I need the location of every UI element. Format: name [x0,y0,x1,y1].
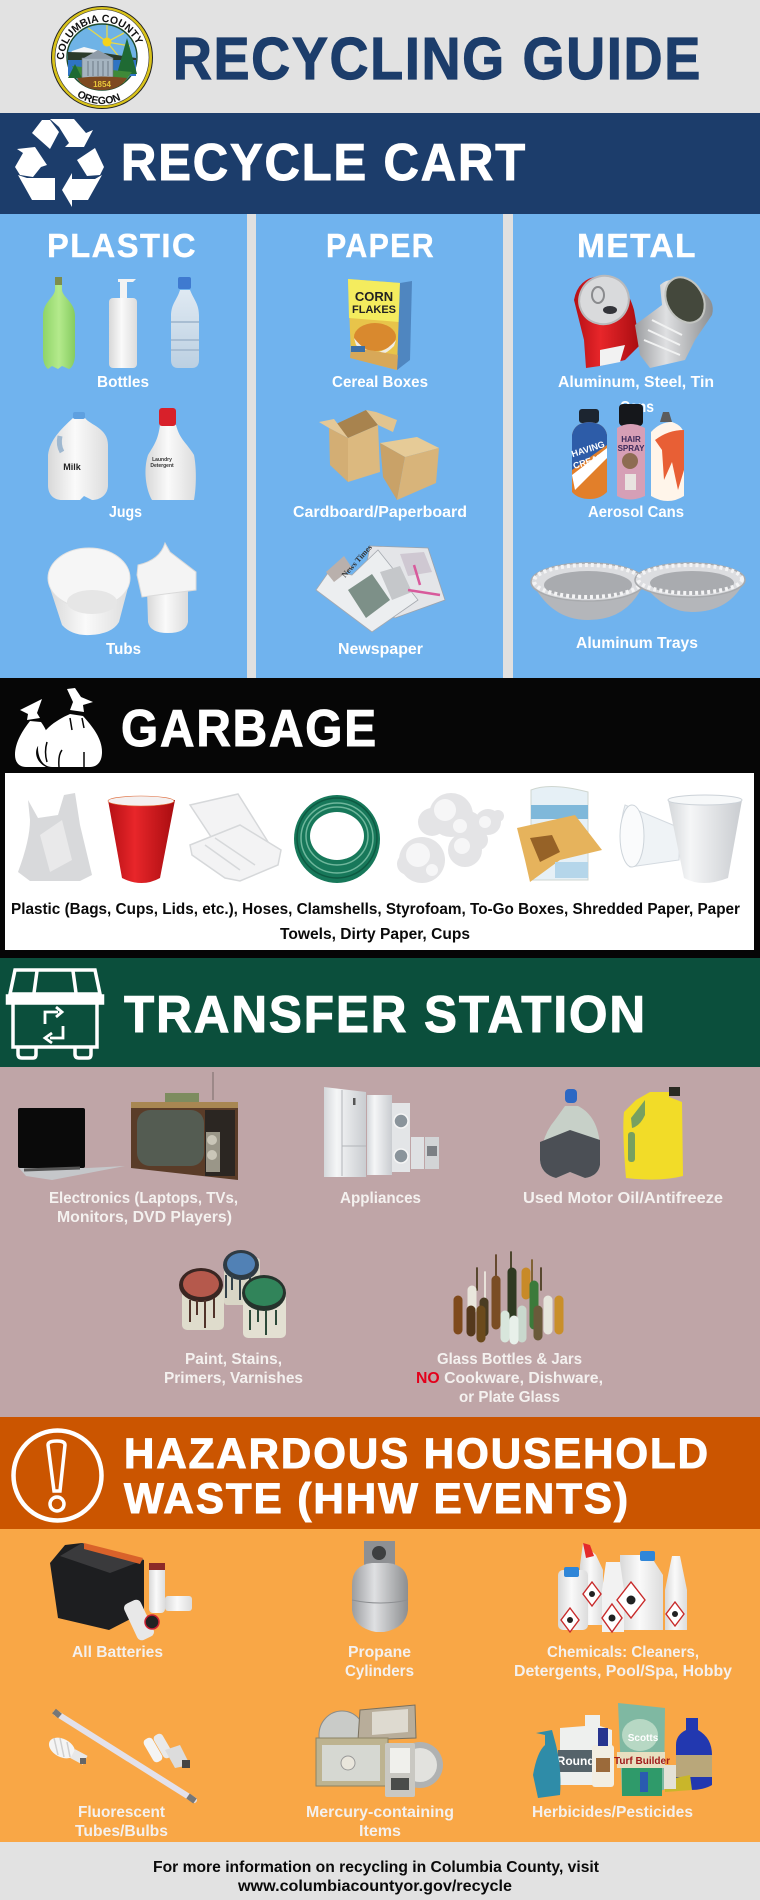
heading: paper: PAPER [326,227,435,264]
heading: hazardous household waste [124,1430,710,1523]
icon: jugs [48,408,196,500]
icon: aerosol cans: HAVING [570,439,606,459]
icon: hose [294,795,380,883]
label: mercury: Mercury-containing [306,1804,454,1821]
icon: garbage bags [15,688,102,767]
icon: jugs: Laundry [152,457,172,463]
heading: hazardous household waste: WASTE (HHW EVENTS) [124,1475,630,1523]
icon: aerosol cans [570,404,684,501]
icon: herbicides and pesticides: Turf Builder [614,1756,670,1767]
text: garbage items: Towels, Dirty Paper, Cups [280,926,470,943]
label: cans overflow line: Cans [620,399,654,416]
icon: clamshell [190,794,281,881]
icon: dumpster [8,970,102,1058]
icon: bottles [43,277,199,369]
title: RECYCLING GUIDE [173,26,702,92]
label: electronics [49,1190,238,1226]
icon: aluminum trays [531,563,745,620]
icon: herbicides and pesticides [533,1703,712,1798]
icon: herbicides and pesticides: Roundup [557,1754,609,1768]
icon: glass bottles [458,1252,559,1340]
county seal logo: COLUMBIA COUNTY [56,14,144,60]
label: motor oil: Used Motor Oil/Antifreeze [523,1190,723,1207]
label: chemicals: Chemicals: Cleaners, [547,1644,699,1661]
icon: laptop and tv [18,1072,238,1180]
icon: cereal box [348,279,412,370]
icon: tubs [48,543,196,635]
icon: paint cans [179,1250,286,1338]
icon: chemical bottles [558,1543,687,1632]
county seal logo: OREGON [78,91,120,104]
heading: plastic: PLASTIC [47,227,197,264]
icon: cereal box: FLAKES [352,304,396,316]
label: cardboard/paperboard: Cardboard/Paperboard [293,504,467,521]
heading: garbage: GARBAGE [121,700,378,758]
icon: newspapers [316,543,445,632]
label: aluminum, steel, tin cans: Aluminum, Steel, Tin [558,374,714,391]
county seal logo: 1854 [93,80,111,89]
icon: recycle symbol [15,119,104,207]
label: jugs: Jugs [109,504,142,521]
icon: crushed cans [571,268,713,368]
icon: dirty paper [517,786,602,882]
panel: paper [256,214,503,678]
icon: newspapers: News Times [340,543,374,579]
icon: cereal box: CORN [355,289,393,304]
label: cereal boxes: Cereal Boxes [332,374,428,391]
footer text: www.columbiacountyor.gov/recycle [237,1878,512,1895]
icon: aerosol cans: SPRAY [618,444,645,453]
label: paint [164,1351,303,1387]
label: electronics: Electronics (Laptops, TVs, [49,1190,238,1207]
panel: plastic [0,214,247,678]
panel: hazardous items [45,1541,732,1840]
label: mercury: Items [359,1823,401,1840]
footer text: For more information on recycling in Columbia County, visit [153,1859,599,1876]
icon: jugs: Milk [63,462,82,472]
label: newspaper: Newspaper [338,641,423,658]
label: paint: Primers, Varnishes [164,1370,303,1387]
label: fluorescent: Fluorescent [78,1804,165,1821]
icon: jugs: Detergent [150,463,174,469]
label: bottles: Bottles [97,374,149,391]
heading: metal: METAL [577,227,697,264]
label: chemicals [514,1644,732,1680]
icon: warning exclamation [14,1430,102,1520]
icon: fluorescent tube and bulbs [45,1711,195,1801]
label: propane: Cylinders [345,1663,414,1680]
icon: batteries [50,1543,192,1642]
icon: plastic bag [18,793,92,881]
label: tubs: Tubs [106,641,141,658]
label: herbicides: Herbicides/Pesticides [532,1804,693,1821]
label: glass [416,1351,603,1406]
label: chemicals: Detergents, Pool/Spa, Hobby [514,1663,732,1680]
icon: foam cups [620,795,742,883]
heading: recycle cart: RECYCLE CART [121,134,527,192]
footer text [153,1859,599,1895]
panel: metal [513,214,760,678]
icon: cardboard boxes [319,410,439,500]
icon: shredded paper tissue [397,793,504,883]
icon: aerosol cans: CREAM [572,451,606,471]
text: garbage items: Plastic (Bags, Cups, Lids, etc.), Hoses, Clamshells, Styrofoam, To-Go Boxes, Shredded Paper, Paper [11,901,740,918]
icon: motor oil and antifreeze [540,1087,683,1180]
icon: red cup [108,796,175,883]
label: glass: or Plate Glass [459,1389,560,1406]
label: propane: Propane [348,1644,411,1661]
icon: herbicides and pesticides: Scotts [628,1733,659,1744]
label: electronics: Monitors, DVD Players) [57,1209,232,1226]
label: mercury [306,1804,454,1840]
icon: aerosol cans: HAIR [621,435,641,444]
icon: propane cylinder [352,1541,408,1632]
label: fluorescent [75,1804,168,1840]
label: all batteries: All Batteries [72,1644,163,1661]
label: aerosol cans: Aerosol Cans [588,504,684,521]
panel: garbage items [5,773,754,950]
heading: hazardous household waste: HAZARDOUS HOUSEHOLD [124,1430,710,1478]
heading: transfer station: TRANSFER STATION [124,986,647,1044]
text: garbage items [11,901,740,943]
icon: appliances [324,1087,439,1177]
label: glass: NO Cookware, Dishware, [416,1370,603,1387]
label: propane [345,1644,414,1680]
label: glass: Glass Bottles & Jars [437,1351,582,1368]
label: appliances: Appliances [340,1190,421,1207]
label: aluminum trays: Aluminum Trays [576,635,698,652]
label: fluorescent: Tubes/Bulbs [75,1823,168,1840]
label: paint: Paint, Stains, [185,1351,282,1368]
county seal logo [51,6,153,109]
icon: mercury thermostats [316,1705,443,1797]
panel: transfer station items [18,1072,723,1406]
